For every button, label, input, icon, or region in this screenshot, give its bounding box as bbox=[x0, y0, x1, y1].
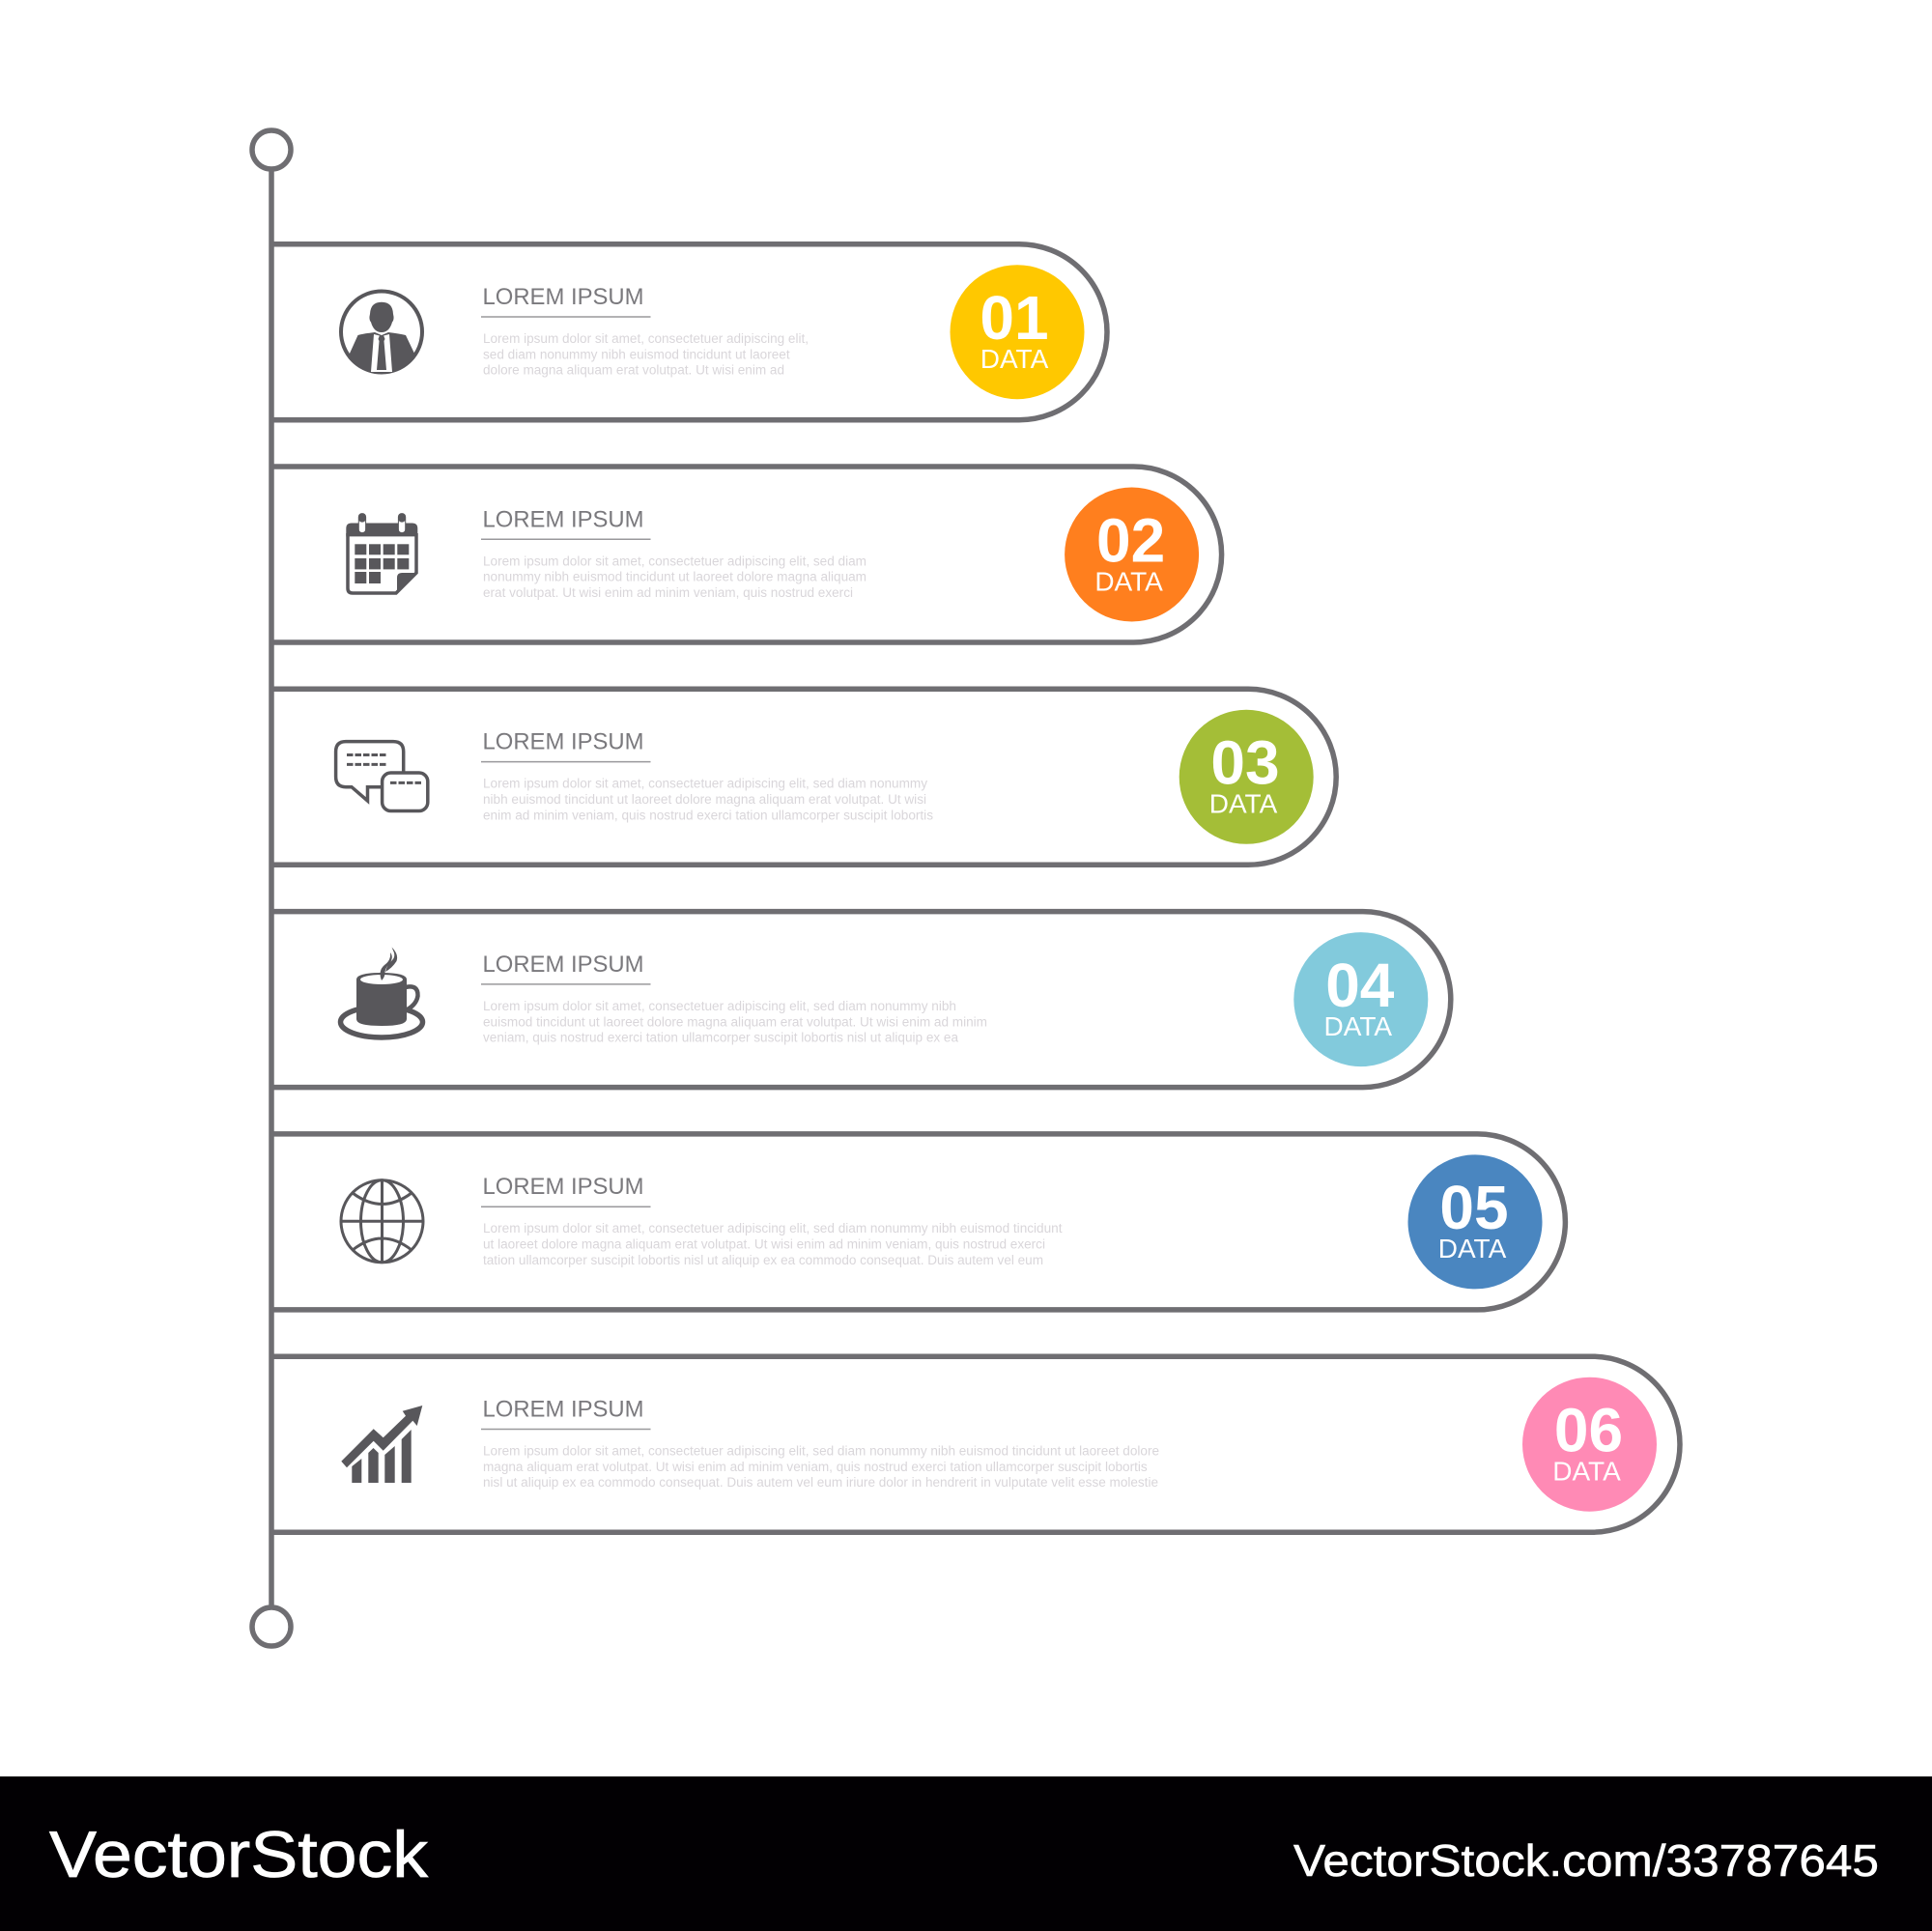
heading: row 02: LOREM IPSUM bbox=[483, 506, 643, 532]
text block: row 04 bbox=[483, 999, 987, 1045]
text block: row 01 bbox=[483, 331, 809, 378]
text block: row 01: dolore magna aliquam erat volutpat. Ut wisi enim ad bbox=[483, 363, 784, 378]
badge: 05 data bbox=[1408, 1154, 1542, 1289]
text block: row 05 bbox=[483, 1221, 1063, 1267]
badge: 01 data bbox=[951, 265, 1084, 399]
badge: 04 data: 04 bbox=[1325, 951, 1395, 1020]
icon: growth chart bbox=[341, 1406, 422, 1483]
footer bar bbox=[0, 1776, 1932, 1931]
text block: row 01: Lorem ipsum dolor sit amet, consectetuer adipiscing elit, bbox=[483, 331, 809, 346]
text block: row 02: nonummy nibh euismod tincidunt ut laoreet dolore magna aliquam bbox=[483, 570, 867, 584]
badge: 03 data bbox=[1179, 710, 1314, 844]
text block: row 03: Lorem ipsum dolor sit amet, consectetuer adipiscing elit, sed diam nonummy bbox=[483, 777, 927, 791]
badge: 06 data: 06 bbox=[1554, 1395, 1623, 1464]
text block: row 06: nisl ut aliquip ex ea commodo consequat. Duis autem vel eum iriure dolor in hendrerit in vulputate velit esse molestie bbox=[483, 1475, 1158, 1490]
text block: row 05: tation ullamcorper suscipit lobortis nisl ut aliquip ex ea commodo consequat. Duis autem vel eum bbox=[483, 1253, 1043, 1267]
footer bar: VectorStock bbox=[49, 1818, 429, 1891]
heading: row 04: LOREM IPSUM bbox=[483, 951, 643, 978]
panel: row 04 bbox=[271, 912, 1451, 1088]
panel: row 05 bbox=[271, 1134, 1565, 1310]
text block: row 04: veniam, quis nostrud exerci tation ullamcorper suscipit lobortis nisl ut aliquip ex ea bbox=[483, 1031, 959, 1045]
text block: row 02: erat volutpat. Ut wisi enim ad minim veniam, quis nostrud exerci bbox=[483, 585, 853, 600]
heading: row 01: LOREM IPSUM bbox=[483, 284, 643, 310]
heading: row 03: LOREM IPSUM bbox=[483, 729, 643, 755]
heading: row 06: LOREM IPSUM bbox=[483, 1397, 643, 1422]
text block: row 02 bbox=[483, 554, 867, 600]
icon: coffee cup bbox=[340, 947, 423, 1037]
text block: row 03: enim ad minim veniam, quis nostrud exerci tation ullamcorper suscipit lobortis bbox=[483, 808, 933, 822]
badge: 01 data: DATA bbox=[980, 344, 1049, 374]
badge: 02 data: 02 bbox=[1096, 505, 1165, 575]
badge: 06 data bbox=[1522, 1377, 1657, 1512]
text block: row 06 bbox=[483, 1443, 1159, 1490]
text block: row 04: Lorem ipsum dolor sit amet, consectetuer adipiscing elit, sed diam nonummy nibh bbox=[483, 999, 956, 1013]
badge: 03 data: DATA bbox=[1209, 789, 1278, 819]
badge: 02 data bbox=[1065, 487, 1199, 622]
text block: row 06: Lorem ipsum dolor sit amet, consectetuer adipiscing elit, sed diam nonummy nibh euismod tincidunt ut laoreet dolore bbox=[483, 1443, 1159, 1459]
badge: 01 data: 01 bbox=[980, 283, 1049, 353]
text block: row 03 bbox=[483, 777, 933, 822]
icon: businessman bbox=[341, 292, 422, 377]
panel: row 01 bbox=[273, 244, 1107, 420]
badge: 03 data: 03 bbox=[1210, 728, 1280, 798]
text block: row 04: euismod tincidunt ut laoreet dolore magna aliquam erat volutpat. Ut wisi enim ad minim bbox=[483, 1014, 987, 1029]
text block: row 05: ut laoreet dolore magna aliquam erat volutpat. Ut wisi enim ad minim veniam, quis nostrud exerci bbox=[483, 1237, 1045, 1252]
panel: row 03 bbox=[271, 689, 1336, 865]
badge: 04 data: DATA bbox=[1324, 1011, 1392, 1041]
icon: calendar bbox=[346, 514, 417, 593]
panel: row 02 bbox=[271, 467, 1222, 642]
badge: 06 data: DATA bbox=[1552, 1457, 1621, 1486]
text block: row 01: sed diam nonummy nibh euismod tincidunt ut laoreet bbox=[483, 347, 790, 361]
footer bar: VectorStock.com/33787645 bbox=[1293, 1835, 1879, 1886]
icon: globe bbox=[341, 1180, 423, 1263]
badge: 04 data bbox=[1293, 932, 1428, 1066]
timeline axis bbox=[252, 130, 291, 1646]
text block: row 06: magna aliquam erat volutpat. Ut wisi enim ad minim veniam, quis nostrud exerci tation ullamcorper suscipit lobortis bbox=[483, 1460, 1148, 1474]
heading: row 05: LOREM IPSUM bbox=[483, 1174, 643, 1200]
text block: row 02: Lorem ipsum dolor sit amet, consectetuer adipiscing elit, sed diam bbox=[483, 554, 867, 568]
badge: 05 data: DATA bbox=[1438, 1234, 1507, 1264]
badge: 05 data: 05 bbox=[1439, 1173, 1509, 1242]
text block: row 05: Lorem ipsum dolor sit amet, consectetuer adipiscing elit, sed diam nonummy nibh euismod tincidunt bbox=[483, 1221, 1063, 1235]
text block: row 03: nibh euismod tincidunt ut laoreet dolore magna aliquam erat volutpat. Ut wisi bbox=[483, 792, 926, 807]
panel: row 06 bbox=[271, 1356, 1680, 1532]
icon: chat bubbles bbox=[336, 742, 428, 811]
badge: 02 data: DATA bbox=[1094, 566, 1163, 596]
